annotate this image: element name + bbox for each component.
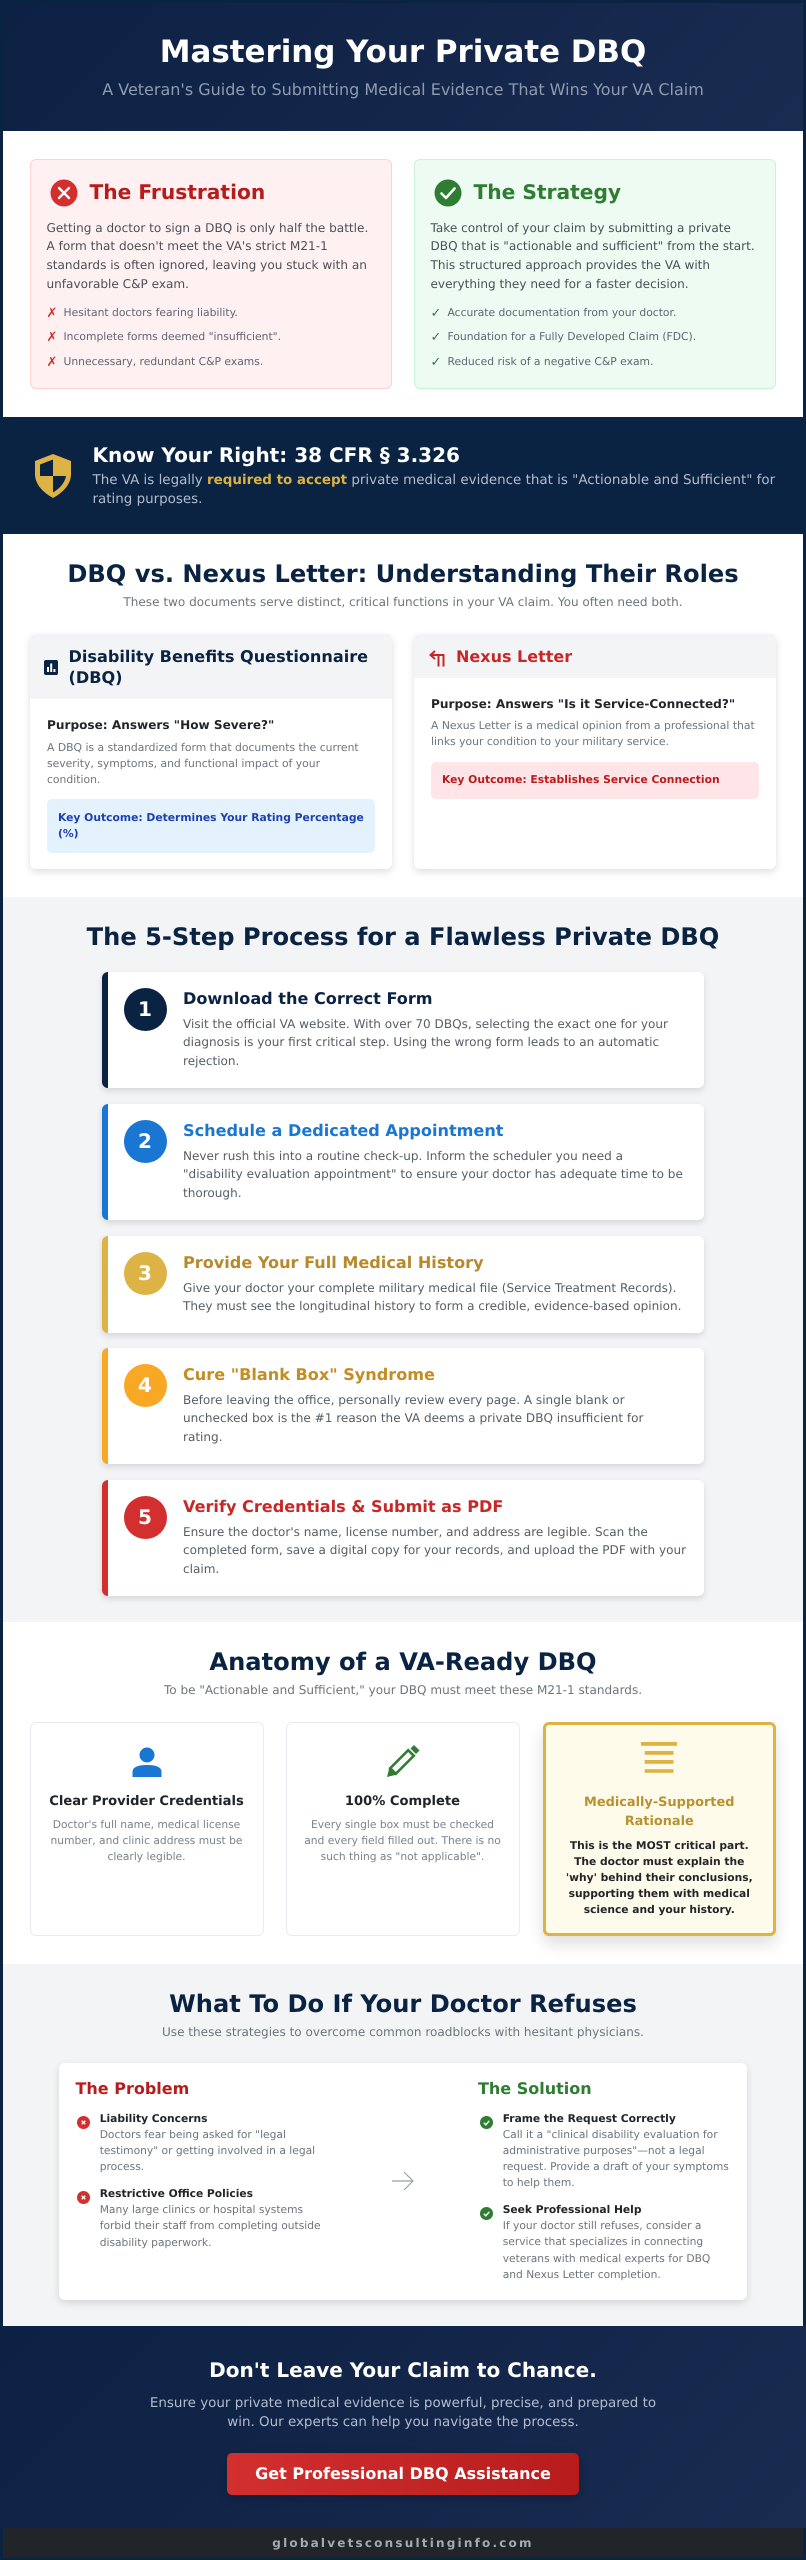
icon: bar chart [44,660,58,675]
step text: claim. [183,1562,219,1576]
card: 100% complete [286,1722,520,1936]
step 3 [102,1236,704,1332]
paragraph: everything they need for a faster decision. [430,277,689,291]
icon: red x circle [50,180,78,206]
icon: text lines [641,1742,677,1773]
item text: request. Provide a draft of your symptoms [503,2160,729,2173]
footer [3,2528,803,2558]
list of benefits: Foundation for a Fully Developed Claim (FDC). [448,330,696,343]
section: 5-step process [3,897,803,1622]
item text [100,2112,315,2173]
step 1 [102,972,704,1088]
list of benefits: ✓ [430,354,441,370]
card text: Every single box must be checked [311,1818,494,1830]
card text: The doctor must explain the [574,1855,744,1868]
item text: Restrictive Office Policies [100,2187,253,2200]
key outcome box [431,762,759,799]
section: dbq vs nexus [3,534,803,897]
number badge [124,1364,166,1407]
item: frame the request [480,2112,729,2189]
step text: Before leaving the office, personally review every page. A single blank or [183,1392,625,1406]
paragraph: Take control of your claim by submitting a private [430,220,731,234]
item text: service that specializes in connecting [503,2235,703,2248]
card text [566,1838,753,1916]
solution column [478,2079,729,2281]
item text: If your doctor still refuses, consider a [503,2219,701,2232]
arrow [392,2172,414,2190]
step text: Ensure the doctor's name, license number, and address are legible. Scan the [183,1524,648,1538]
paragraph: unfavorable C&P exam. [46,277,189,291]
step title: Download the Correct Form [183,989,433,1008]
item text [503,2112,729,2189]
panel: problem and solution [59,2063,746,2300]
description: condition. [47,773,100,786]
section subtitle: To be "Actionable and Sufficient," your DBQ must meet these M21-1 standards. [164,1683,642,1697]
list of frustrations: Unnecessary, redundant C&P exams. [64,354,263,368]
list of benefits: Accurate documentation from your doctor. [448,306,676,319]
number badge: 2 [138,1129,152,1153]
description: links your condition to your military service. [431,735,669,748]
section: frustration and strategy [3,131,803,417]
step text: unchecked box is the #1 reason the VA deems a private DBQ insufficient for [183,1411,643,1425]
band: know your right [0,417,806,534]
step text: "disability evaluation appointment" to ensure your doctor has adequate time to be [183,1167,683,1181]
icon: x badge [77,2116,90,2129]
cta button: Get Professional DBQ Assistance [255,2464,551,2483]
panel: the frustration [30,159,392,389]
card header [414,634,776,678]
item text: Liability Concerns [100,2112,207,2125]
item text: Frame the Request Correctly [503,2112,676,2125]
item: seek professional help [480,2203,710,2281]
card text: and every field filled out. There is no [304,1834,501,1847]
key outcome box: (%) [58,827,79,840]
title: Mastering Your Private DBQ [160,34,646,70]
number badge [124,988,166,1031]
paragraph: This structured approach provides the VA with [430,258,710,272]
number badge [124,1252,166,1295]
footer: globalvetsconsultinginfo.com [272,2536,534,2550]
card: provider credentials [30,1722,264,1936]
heading: the solution: The Solution [478,2079,592,2098]
step text [182,1280,681,1313]
item text: administrative purposes"—not a legal [503,2144,705,2157]
step 5 [102,1480,704,1596]
item text: Call it a "clinical disability evaluation for [503,2128,718,2141]
cta button [227,2453,579,2495]
card text [304,1818,501,1863]
item text: and Nexus Letter completion. [503,2268,661,2281]
icon: nexus arrow [429,650,444,666]
description [47,740,359,786]
item: restrictive office policies [77,2187,321,2249]
card title: Disability Benefits Questionnaire [68,646,368,666]
item text [100,2187,321,2249]
card title: Nexus Letter [456,646,572,666]
list of frustrations: Hesitant doctors fearing liability. [64,306,238,319]
icon: shield [35,454,71,498]
icon: green check circle [434,180,462,206]
icon: person [132,1748,162,1777]
step text: rating. [183,1430,223,1444]
step text: They must see the longitudinal history to form a credible, evidence-based opinion. [183,1299,681,1313]
item text: forbid their staff from completing outside [100,2219,321,2232]
cta text: win. Our experts can help you navigate the process. [227,2414,579,2430]
list of benefits [430,306,696,370]
card text: clearly legible. [107,1850,186,1863]
heading: Anatomy of a VA-Ready DBQ [209,1648,597,1676]
card: medically-supported rationale [542,1722,776,1936]
step text [183,1524,686,1576]
item text: Doctors fear being asked for "legal [100,2128,286,2141]
item text: process. [100,2160,144,2173]
card title [584,1795,734,1829]
panel: the strategy [414,159,776,389]
card text: science and your history. [584,1903,735,1916]
heading: The 5-Step Process for a Flawless Private DBQ [87,922,719,950]
card: nexus letter [414,634,776,869]
heading: DBQ vs. Nexus Letter: Understanding Their Roles [67,560,739,588]
description [431,719,755,748]
section subtitle: These two documents serve distinct, critical functions in your VA claim. You often need both. [123,595,683,609]
heading: the problem: The Problem [76,2079,189,2098]
card text: Doctor's full name, medical license [53,1818,240,1830]
description: severity, symptoms, and functional impact of your [47,757,320,770]
item text: to help them. [503,2176,575,2189]
step title: Schedule a Dedicated Appointment [183,1121,503,1140]
item text: Seek Professional Help [503,2203,642,2216]
card title: Rationale [625,1814,694,1829]
description: A Nexus Letter is a medical opinion from a professional that [431,719,755,732]
heading: Know Your Right: 38 CFR § 3.326 [92,442,460,466]
section: doctor refuses [3,1964,803,2326]
list of benefits: Reduced risk of a negative C&P exam. [448,354,653,368]
card header [30,634,392,699]
step 2 [102,1104,704,1220]
list of frustrations: Incomplete forms deemed "insufficient". [64,330,281,343]
number badge [124,1496,166,1539]
step text: diagnosis is your first critical step. Using the wrong form leads to an automatic [183,1035,659,1049]
icon: pencil [387,1745,420,1777]
step text: thorough. [183,1186,242,1200]
section: anatomy [3,1622,803,1964]
list of frustrations: ✗ [46,330,57,345]
paragraph [430,220,755,291]
step text: completed form, save a digital copy for your records, and upload the PDF with your [183,1543,686,1557]
item: liability concerns [77,2112,315,2173]
item text: Many large clinics or hospital systems [100,2203,303,2216]
call to action [0,2326,806,2528]
step text [183,1392,644,1444]
card title: (DBQ) [68,668,123,687]
step text [183,1148,683,1200]
cta heading: Don't Leave Your Claim to Chance. [209,2358,597,2382]
purpose heading: Purpose: Answers "How Severe?" [47,718,274,732]
step title: Provide Your Full Medical History [183,1253,484,1272]
paragraph: standards is often ignored, leaving you stuck with an [46,258,367,272]
number badge: 5 [138,1505,152,1529]
step text: Never rush this into a routine check-up. Inform the scheduler you need a [183,1148,623,1162]
number badge: 1 [138,997,152,1021]
list of benefits: ✓ [430,330,441,345]
paragraph [46,220,368,291]
heading: The Frustration [90,180,265,204]
card title: Clear Provider Credentials [49,1794,244,1809]
card text [51,1818,242,1863]
key outcome box [47,799,375,853]
number badge [124,1120,166,1163]
purpose heading: Purpose: Answers "Is it Service-Connected?" [431,696,735,710]
step title: Verify Credentials & Submit as PDF [183,1497,503,1516]
header banner [3,3,803,131]
icon: check badge [480,2116,493,2129]
step title: Cure "Blank Box" Syndrome [183,1365,435,1384]
item text [503,2203,710,2281]
subtitle: A Veteran's Guide to Submitting Medical Evidence That Wins Your VA Claim [102,80,704,99]
heading: What To Do If Your Doctor Refuses [169,1990,637,2018]
card title [68,646,368,687]
card text: such thing as "not applicable". [321,1850,484,1863]
paragraph [92,472,776,506]
step 4 [102,1348,704,1464]
step text [183,1016,668,1068]
icon: check badge [480,2207,493,2220]
icon: x badge [77,2191,90,2204]
number badge: 3 [138,1261,152,1285]
step text: Give your doctor your complete military medical file (Service Treatment Records). [183,1280,676,1294]
number badge: 4 [138,1373,152,1397]
list of frustrations: ✗ [46,354,57,370]
list of frustrations: ✗ [46,306,57,321]
item text: disability paperwork. [100,2236,212,2249]
paragraph: A form that doesn't meet the VA's strict M21-1 [46,239,328,253]
cta text: Ensure your private medical evidence is powerful, precise, and prepared to [150,2396,656,2410]
card: dbq [30,634,392,869]
list of benefits: ✓ [430,306,441,321]
card title: 100% Complete [345,1794,460,1809]
section subtitle: Use these strategies to overcome common roadblocks with hesitant physicians. [162,2024,644,2038]
key outcome box: Key Outcome: Establishes Service Connection [442,773,720,786]
card title: Medically-Supported [584,1795,734,1810]
card text: number, and clinic address must be [51,1834,242,1847]
step text: Visit the official VA website. With over 70 DBQs, selecting the exact one for your [183,1016,668,1030]
cta text [0,2394,806,2432]
description: A DBQ is a standardized form that documents the current [47,740,359,754]
problem column [76,2079,321,2249]
card text: 'why' behind their conclusions, [566,1871,753,1884]
card text: This is the MOST critical part. [570,1838,749,1852]
item text: veterans with medical experts for DBQ [503,2252,710,2265]
heading: The Strategy [474,180,621,204]
paragraph: The VA is legally required to accept private medical evidence that is "Actionable and Sufficient" for [92,472,775,488]
paragraph: Getting a doctor to sign a DBQ is only half the battle. [46,220,368,234]
paragraph: DBQ that is "actionable and sufficient" from the start. [430,239,755,253]
paragraph: rating purposes. [92,492,202,506]
step text: rejection. [183,1054,239,1068]
key outcome box: Key Outcome: Determines Your Rating Percentage [58,810,364,824]
list of frustrations [46,306,281,370]
card text: supporting them with medical [569,1887,750,1900]
item text: testimony" or getting involved in a legal [100,2144,315,2157]
